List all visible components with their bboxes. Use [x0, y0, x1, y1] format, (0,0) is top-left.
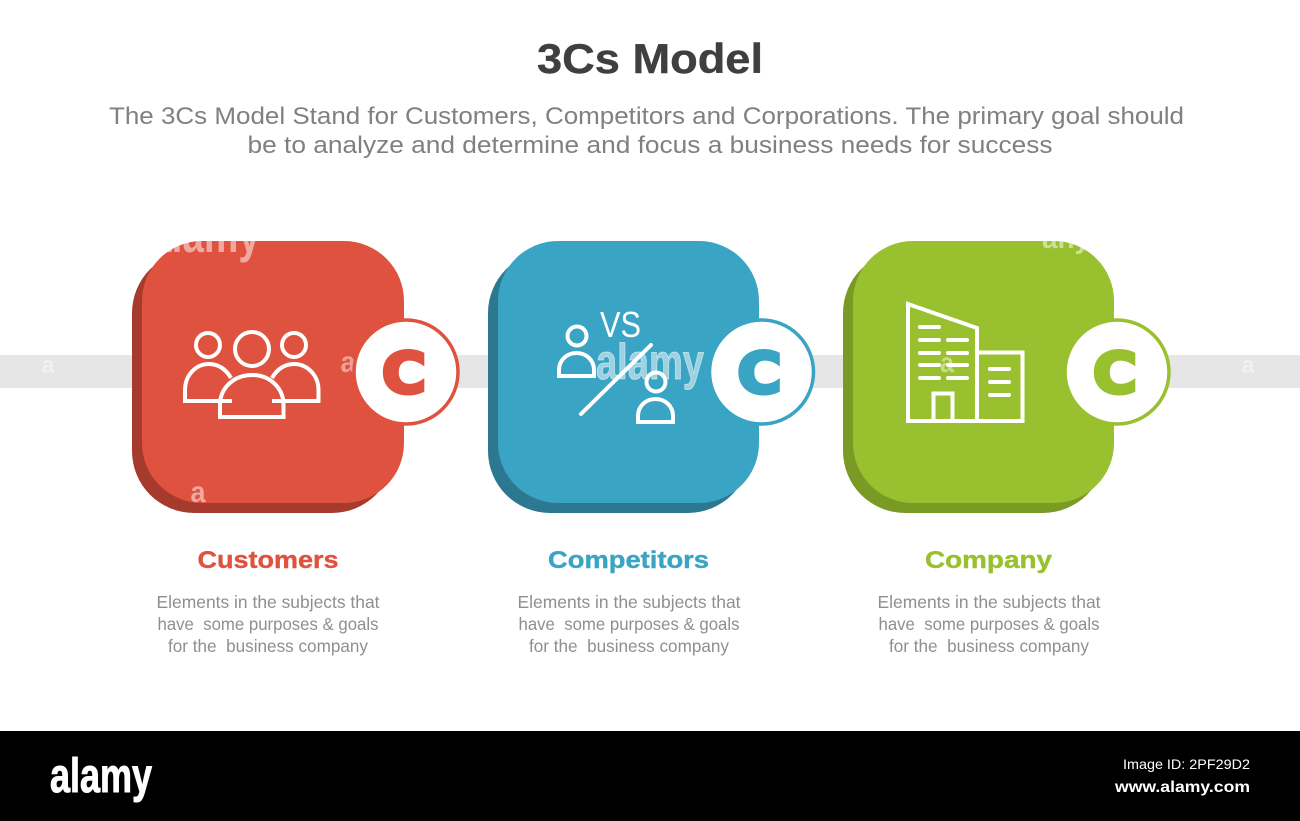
watermark: customers card top: alamy: [150, 207, 260, 263]
watermark: company card top: any: [1042, 222, 1090, 255]
horizontal connector band: [0, 355, 1300, 388]
badge: company C: [1065, 320, 1169, 424]
watermark: band right: a: [1242, 352, 1255, 379]
watermark: company icon: a: [940, 347, 954, 378]
card shadow: competitors: [488, 251, 750, 513]
card face: competitors: [498, 241, 759, 503]
text block: customers: [156, 592, 380, 656]
icon: person versus person: VS: [600, 304, 641, 345]
heading: company: Company: [925, 547, 1053, 574]
text block: company: [878, 592, 1101, 656]
card shadow: company: [843, 251, 1105, 513]
footer url: www.alamy.com: [1114, 779, 1250, 796]
panel: competitors: [488, 241, 814, 513]
text block: competitors: [518, 592, 741, 656]
badge: customers C: [354, 320, 458, 424]
footer bar: [0, 731, 1300, 821]
badge: company C: C: [1093, 342, 1137, 406]
panel: company: [843, 222, 1169, 513]
text block: competitors: have some purposes & goals: [518, 614, 740, 634]
card shadow: customers: [132, 251, 394, 513]
text block: customers: for the business company: [168, 636, 368, 656]
text block: competitors: for the business company: [529, 636, 729, 656]
badge: competitors C: C: [738, 342, 782, 406]
subtitle text block: [109, 103, 1184, 159]
subtitle text block: The 3Cs Model Stand for Customers, Competitors and Corporations. The primary goal should: [109, 103, 1184, 130]
text block: customers: Elements in the subjects that: [156, 592, 380, 612]
watermark: customers card side: a: [340, 346, 356, 379]
text block: company: have some purposes & goals: [878, 614, 1100, 634]
icon: office buildings: [908, 304, 1022, 421]
footer image id: Image ID: 2PF29D2: [1123, 756, 1250, 772]
badge: customers C: C: [382, 342, 426, 406]
card face: customers: [142, 241, 404, 503]
text block: company: Elements in the subjects that: [878, 592, 1101, 612]
badge: competitors C: [710, 320, 814, 424]
panel: customers: [132, 207, 458, 513]
text block: customers: have some purposes & goals: [158, 614, 379, 634]
heading: competitors: Competitors: [548, 547, 709, 574]
footer logo: alamy: [50, 750, 152, 803]
card face: company: [853, 241, 1114, 503]
icon: person versus person: [559, 304, 673, 422]
text block: competitors: Elements in the subjects that: [518, 592, 741, 612]
icon: group of people: [185, 332, 318, 417]
text block: company: for the business company: [889, 636, 1089, 656]
title: 3Cs Model: [537, 35, 763, 82]
heading: customers: Customers: [198, 547, 338, 574]
subtitle text block: be to analyze and determine and focus a business needs for success: [248, 132, 1052, 159]
watermark: band left: a: [42, 352, 55, 379]
watermark: customers card bottom: a: [190, 476, 206, 509]
watermark: alamy center: alamy: [596, 334, 704, 390]
